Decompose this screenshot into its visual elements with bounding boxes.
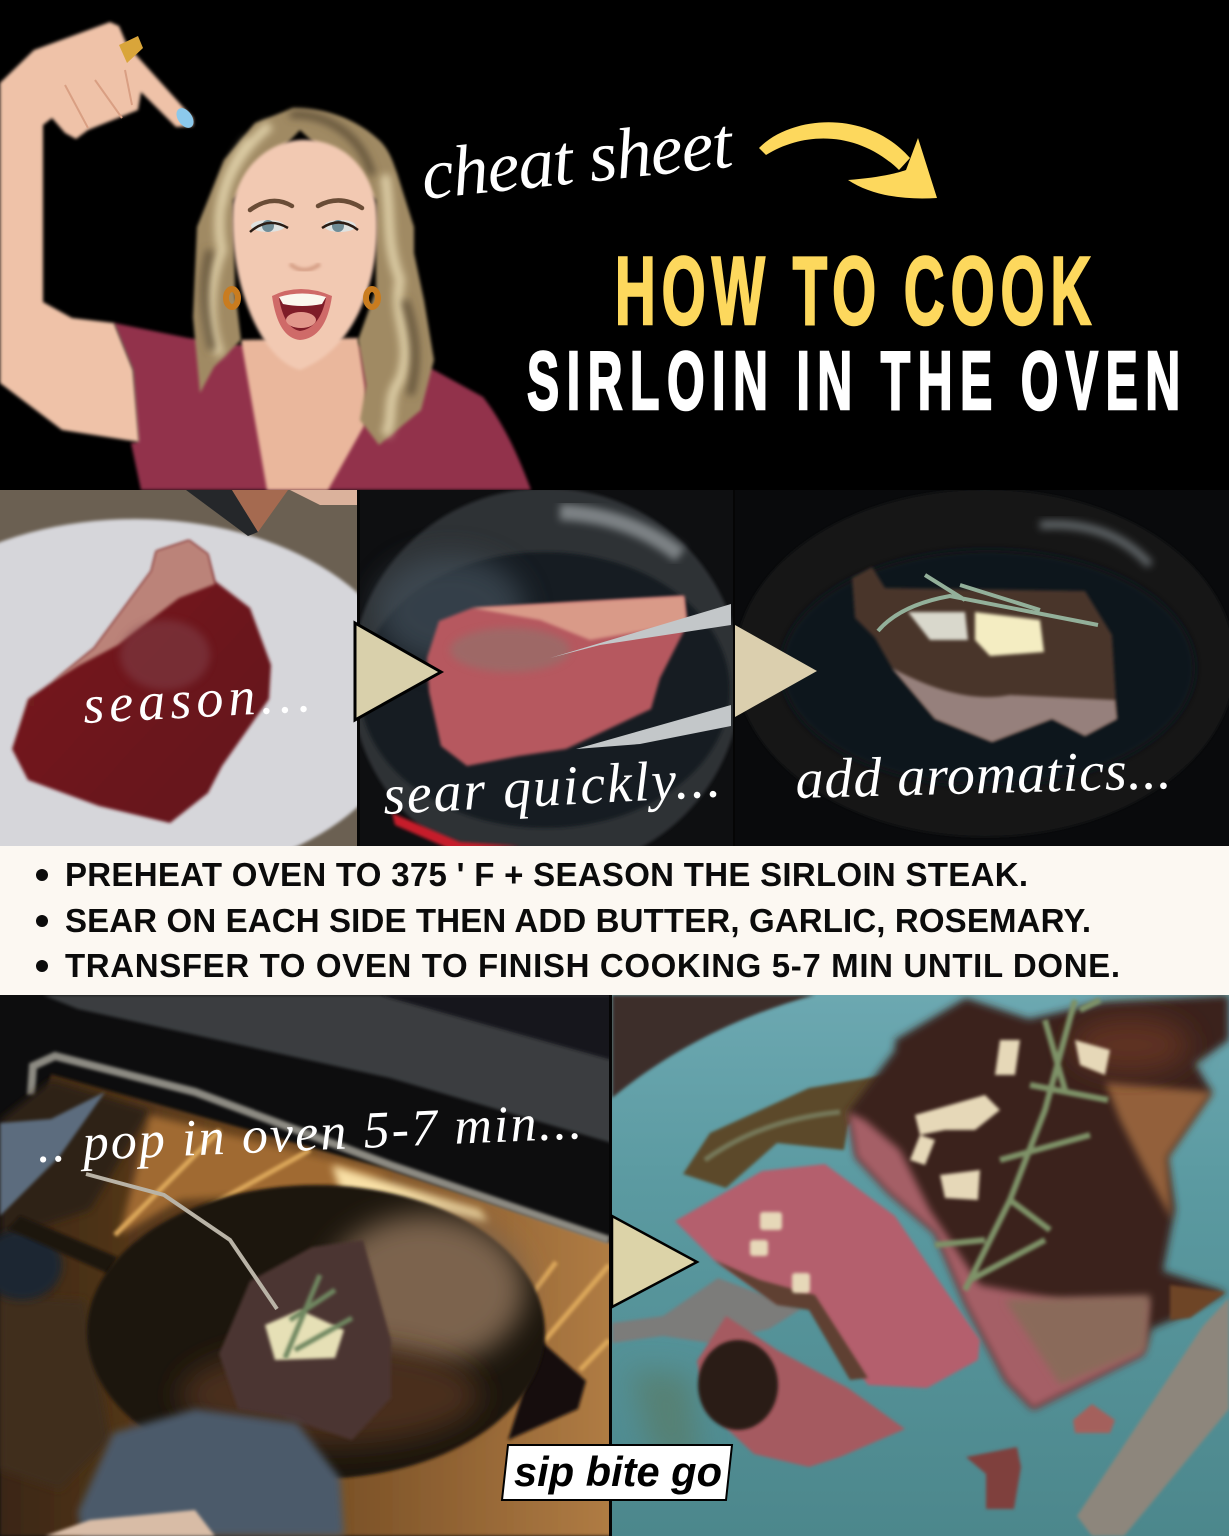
arrow: oven to finished steak	[612, 1216, 697, 1307]
step 3: TRANSFER TO OVEN TO FINISH COOKING 5-7 MIN UNTIL DONE.	[65, 947, 1120, 984]
dark oven wall shadow	[0, 1080, 150, 1240]
title line: how to cook: HOW TO COOK	[615, 236, 1091, 345]
meat juices	[683, 1073, 899, 1188]
panel: sear quickly	[360, 490, 733, 846]
steak slice	[675, 1164, 980, 1388]
skillet handle left	[8, 1216, 117, 1274]
blue nail	[176, 108, 194, 128]
seared steak	[852, 567, 1117, 742]
warm pan base	[180, 1345, 480, 1445]
fat nub	[1170, 1285, 1226, 1320]
panel: finished sliced sirloin	[612, 995, 1229, 1536]
dress	[114, 323, 531, 490]
title line: sirloin in the oven: SIRLOIN IN THE OVEN	[527, 336, 1180, 427]
neck and chest	[241, 338, 369, 490]
eyes	[250, 220, 358, 232]
panel: season the steak	[0, 490, 357, 846]
open mouth	[272, 289, 332, 340]
fat cap	[52, 540, 215, 682]
rosemary in juices	[705, 1112, 840, 1160]
left baking tray	[0, 1295, 110, 1490]
hair highlights	[211, 125, 405, 435]
step 1: PREHEAT OVEN TO 375 ' F + SEASON THE SIRLOIN STEAK.	[65, 856, 1028, 893]
logo: sip bite go: sip bite go	[514, 1448, 722, 1495]
whole steak	[848, 995, 1229, 1409]
gutter between photos	[0, 490, 1229, 846]
tongs	[550, 604, 731, 749]
pan base	[781, 550, 1195, 786]
steam	[375, 555, 525, 665]
brown crust edge	[1005, 1295, 1150, 1385]
door seal	[31, 1056, 609, 1240]
seasoning specks	[120, 620, 210, 690]
end piece	[697, 1316, 905, 1467]
cast iron pan	[735, 489, 1229, 837]
arrow: sear to aromatics	[735, 625, 817, 717]
glowing rails and racks	[115, 1130, 609, 1370]
cast iron pan rim	[360, 490, 733, 846]
label: season: season...	[81, 663, 312, 735]
header background	[0, 0, 1229, 490]
panel: instruction steps	[0, 846, 1229, 995]
meat scrap	[966, 1447, 1021, 1509]
cast iron skillet	[87, 1185, 545, 1479]
cooktop surface	[43, 995, 612, 1143]
warm upper crust highlight	[1070, 1017, 1190, 1073]
dark upper right corner	[380, 995, 612, 1060]
searing steak	[427, 596, 687, 766]
label: pop in oven: .. pop in oven 5-7 min...	[36, 1093, 583, 1174]
butter	[975, 612, 1044, 656]
script label: cheat sheet: cheat sheet	[417, 103, 738, 215]
rim highlights	[560, 512, 680, 555]
arm and pointing hand	[0, 22, 193, 442]
plate	[0, 516, 357, 846]
seasoning shaker	[186, 490, 357, 536]
small meat scrap	[1073, 1404, 1115, 1433]
steam over pan	[325, 1215, 525, 1365]
steak in pan	[219, 1240, 391, 1440]
garlic pieces	[750, 1040, 1110, 1293]
title	[527, 236, 1180, 427]
lower mitt	[0, 1230, 62, 1300]
juice stains	[630, 1370, 700, 1470]
panel: pan in the oven	[0, 995, 612, 1536]
hand at bottom	[45, 1510, 215, 1536]
photo: woman pointing down at the title	[0, 22, 531, 490]
face	[232, 140, 377, 370]
seasoning	[450, 628, 570, 672]
icon: yellow curved arrow	[759, 122, 937, 198]
rosemary	[285, 1275, 352, 1358]
nose	[290, 264, 320, 270]
charred crust	[698, 1340, 778, 1430]
pink side of steak	[892, 668, 1117, 742]
burner glow	[392, 813, 520, 850]
rim highlight	[1040, 524, 1150, 565]
hair	[193, 108, 434, 445]
front oven mitt	[78, 1409, 344, 1536]
rosemary sprig	[878, 575, 1098, 631]
finger lines	[65, 70, 132, 128]
fork	[612, 1278, 801, 1343]
knife	[1077, 1298, 1229, 1536]
oven interior	[0, 1074, 612, 1536]
golden fat edge	[1105, 1082, 1212, 1220]
label: sear quickly: sear quickly...	[381, 747, 722, 827]
left oven mitt	[0, 1092, 105, 1216]
fat cap	[472, 596, 687, 640]
arrow: season to sear	[355, 623, 441, 720]
garlic	[908, 612, 968, 640]
label: add aromatics: add aromatics...	[795, 739, 1172, 811]
raw steak	[12, 540, 271, 823]
gutter between lower photos	[609, 995, 612, 1536]
gold ring	[119, 36, 143, 63]
panel: add aromatics	[735, 489, 1229, 846]
red cut side	[848, 1112, 1148, 1409]
oven light	[332, 1165, 488, 1222]
butter	[265, 1310, 344, 1360]
thermometer probe	[86, 1174, 277, 1309]
skillet handle right	[508, 1340, 586, 1440]
oven back wall glow	[120, 1115, 390, 1235]
rosemary sprig	[935, 1000, 1108, 1290]
wooden table corner	[612, 995, 815, 1098]
pan base	[360, 552, 730, 828]
slice crust	[714, 1260, 868, 1380]
earrings	[226, 289, 378, 307]
step 2: SEAR ON EACH SIDE THEN ADD BUTTER, GARLIC, ROSEMARY.	[65, 902, 1091, 939]
eyebrows	[250, 200, 362, 210]
